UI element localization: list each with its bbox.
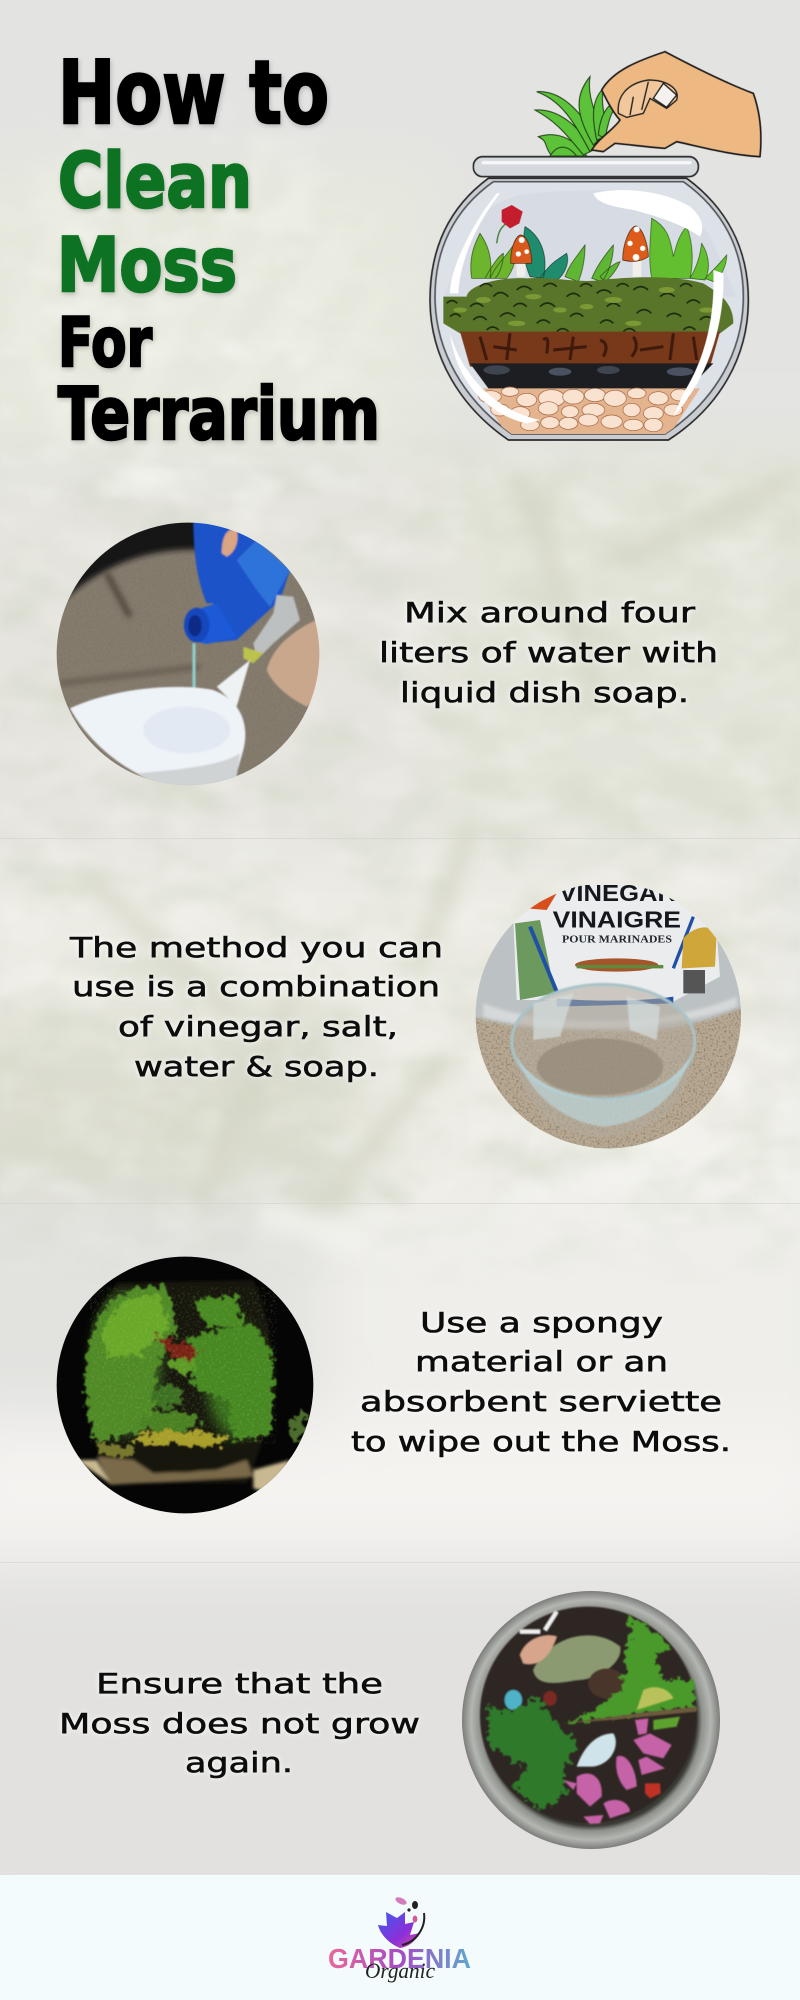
step 4 text: Moss does not grow (59, 1707, 420, 1740)
grass tuft in hand (535, 77, 622, 156)
step 1 photo: pouring soap into water bucket (56, 522, 320, 786)
title: How to (58, 42, 329, 144)
terrarium layers (443, 190, 737, 434)
bowl rim (473, 157, 698, 177)
title: Terrarium (58, 372, 380, 456)
title: Clean (58, 136, 252, 225)
step 4 row (59, 1591, 720, 1849)
step 2 photo: vinegar jug and glass bowl: VINEGAR (559, 880, 676, 906)
glass bowl (430, 178, 748, 440)
plants and mushrooms (471, 205, 727, 282)
step 3 photo: moss terrarium in a black room (56, 1256, 314, 1514)
soil layer (460, 332, 720, 367)
logo: Gardenia Organic (328, 1896, 471, 1983)
title: For (58, 304, 152, 383)
section dividers (0, 838, 800, 1562)
step 1 text (379, 596, 718, 709)
step 4 text: Ensure that the (96, 1667, 383, 1700)
step 2 photo: vinegar jug and glass bowl (476, 883, 741, 1148)
step 3 text: Use a spongy (420, 1306, 663, 1339)
step 4 text: again. (185, 1746, 293, 1779)
step 2 photo: vinegar jug and glass bowl: POUR MARINADES (562, 935, 672, 946)
logo script: Organic (365, 1958, 435, 1983)
step 1 text: liters of water with (379, 636, 718, 669)
charcoal layer (470, 363, 713, 391)
title (57, 42, 380, 456)
hand (592, 52, 761, 157)
step 3 text (351, 1306, 731, 1458)
step 2 text: of vinegar, salt, (118, 1010, 398, 1043)
glass highlights (593, 190, 702, 237)
step 3 row (56, 1256, 728, 1514)
footer band (0, 1875, 800, 2000)
step 2 photo: vinegar jug and glass bowl: VINAIGRE (553, 907, 681, 933)
moss layer (443, 277, 733, 333)
step 4 text (59, 1667, 420, 1779)
terrarium illustration with hand (430, 52, 761, 440)
title: Moss (57, 221, 237, 309)
step 2 text: use is a combination (72, 970, 440, 1003)
step 2 row (70, 883, 741, 1148)
logo wordmark: GARDENIA (328, 1943, 471, 1974)
step 2 text: The method you can (69, 931, 443, 964)
step 3 text: material or an (415, 1345, 668, 1378)
step 3 text: absorbent serviette (360, 1385, 722, 1418)
step 2 text: water & soap. (134, 1050, 379, 1083)
logo blossom icon (378, 1896, 424, 1948)
step 4 photo: terrarium jar seen from above (462, 1591, 720, 1849)
step 1 text: liquid dish soap. (400, 676, 689, 709)
step 2 text (69, 931, 443, 1083)
pebble layer (477, 388, 700, 434)
step 1 text: Mix around four (404, 596, 696, 629)
step 1 row (56, 522, 718, 786)
step 3 text: to wipe out the Moss. (351, 1425, 731, 1458)
